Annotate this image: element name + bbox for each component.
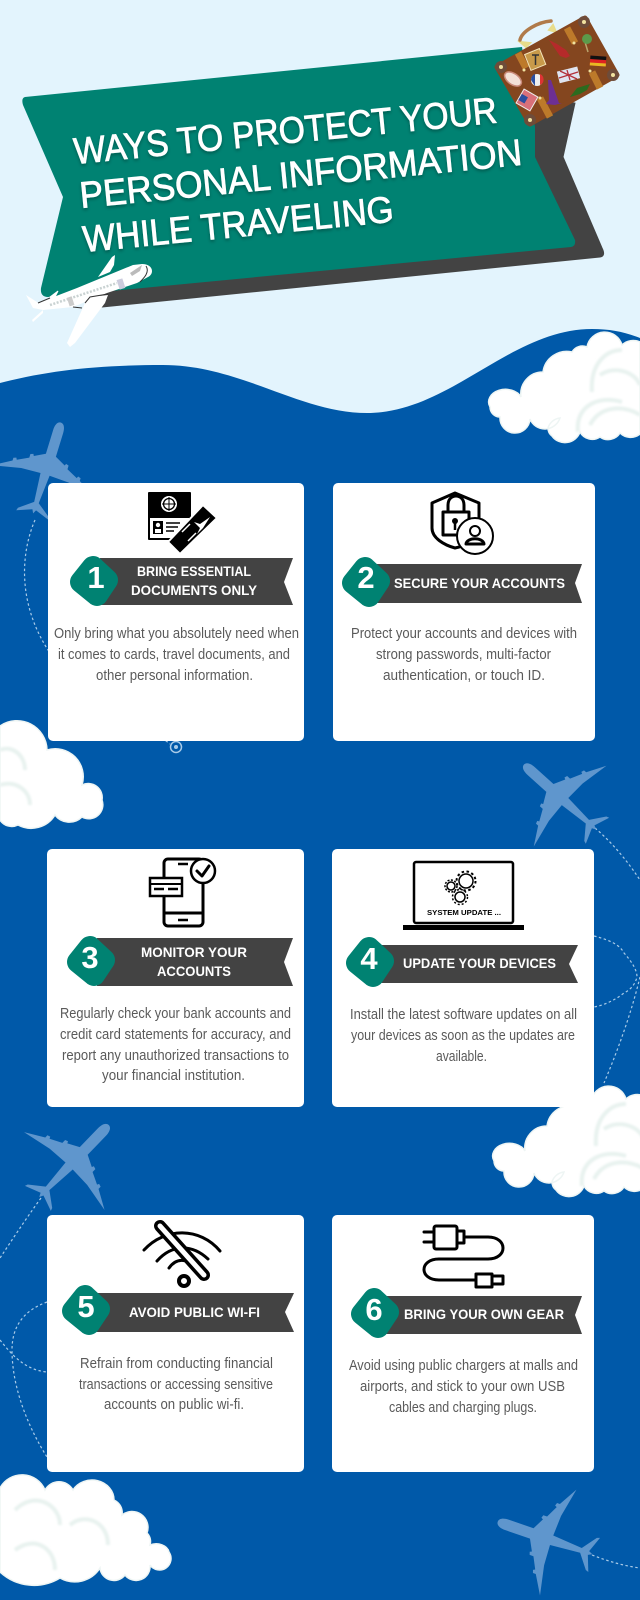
- body text: available.: [436, 1049, 487, 1065]
- number badge 1: 1: [87, 560, 105, 595]
- number badge 3: 3: [81, 940, 99, 975]
- number badge 6: 6: [365, 1292, 383, 1327]
- body text: your devices as soon as the updates are: [351, 1028, 575, 1044]
- icon: plug and cable: [424, 1226, 503, 1287]
- body text: transactions or accessing sensitive: [79, 1377, 273, 1393]
- body text: strong passwords, multi-factor: [376, 647, 551, 663]
- ribbon heading: [97, 938, 293, 986]
- body text: [54, 626, 299, 684]
- body text: [351, 626, 577, 684]
- body text: [349, 1358, 578, 1416]
- ribbon heading: MONITOR YOUR: [141, 944, 247, 960]
- ribbon heading: [380, 945, 578, 983]
- dashed flight paths: [0, 520, 640, 1568]
- body text: it comes to cards, travel documents, and: [58, 647, 290, 663]
- ribbon heading: BRING YOUR OWN GEAR: [404, 1306, 564, 1322]
- number badge 4: 4: [360, 941, 378, 976]
- number badge 5: [73, 1289, 99, 1324]
- body text: Install the latest software updates on all: [350, 1007, 577, 1023]
- body text: other personal information.: [96, 668, 253, 684]
- title text: WHILE TRAVELING: [81, 189, 395, 260]
- handle: [520, 25, 556, 47]
- body text: your financial institution.: [102, 1068, 245, 1084]
- body text: Avoid using public chargers at malls and: [349, 1358, 578, 1374]
- plane silhouette left middle: [0, 1086, 149, 1237]
- body text: authentication, or touch ID.: [383, 668, 545, 684]
- title text: [72, 90, 524, 260]
- banner shadow: [60, 60, 604, 307]
- body text: report any unauthorized transactions to: [62, 1048, 289, 1064]
- ribbon heading: AVOID PUBLIC WI-FI: [129, 1304, 260, 1320]
- ribbon heading: [385, 1296, 582, 1334]
- cloud right middle: [493, 1086, 640, 1197]
- ribbon heading: ACCOUNTS: [157, 963, 231, 979]
- panel: card 4: [332, 849, 594, 1107]
- plane silhouette right upper: [488, 724, 634, 871]
- icon: white airplane: [26, 255, 152, 347]
- number badge 1: [81, 560, 107, 595]
- panel: card 3: [47, 849, 304, 1107]
- ribbon heading: [100, 558, 293, 605]
- plane silhouette bottom right: [479, 1469, 612, 1600]
- number badge 3: [78, 940, 104, 975]
- body: [497, 18, 617, 124]
- cloud left upper: [0, 721, 103, 828]
- body text: Refrain from conducting financial: [80, 1356, 273, 1372]
- panel: card 2: [333, 483, 595, 741]
- stickers: [525, 49, 546, 70]
- body text: [350, 1007, 577, 1065]
- ribbon heading: BRING ESSENTIAL: [137, 563, 251, 579]
- number badge 2: 2: [357, 560, 375, 595]
- body text: airports, and stick to your own USB: [360, 1379, 565, 1395]
- number badge 2: [353, 560, 379, 596]
- body text: [79, 1356, 273, 1413]
- number badge 6: [362, 1292, 388, 1327]
- banner green ribbon: [22, 47, 575, 297]
- icon: shield lock and user: [432, 493, 493, 554]
- blue wave background: [0, 329, 640, 1600]
- panel: card 1: [48, 483, 304, 741]
- icon: laptop system update: [403, 862, 524, 930]
- icon: passport and ticket: [148, 492, 217, 554]
- icon: phone with card and check: [150, 859, 215, 926]
- ribbon heading: DOCUMENTS ONLY: [131, 582, 258, 598]
- body text: accounts on public wi-fi.: [104, 1397, 244, 1413]
- body text: [60, 1006, 291, 1084]
- plane silhouette top left: [0, 407, 112, 531]
- body text: cables and charging plugs.: [389, 1400, 537, 1416]
- icon: laptop system update: SYSTEM UPDATE ...: [427, 908, 501, 917]
- cloud bottom left: [0, 1475, 171, 1585]
- body text: Protect your accounts and devices with: [351, 626, 577, 642]
- ribbon heading: [92, 1293, 294, 1332]
- ribbon heading: UPDATE YOUR DEVICES: [403, 955, 556, 971]
- number badge 5: 5: [77, 1289, 95, 1324]
- body text: credit card statements for accuracy, and: [60, 1027, 291, 1043]
- ribbon heading: [375, 564, 582, 603]
- icon: crossed wifi: [144, 1226, 220, 1286]
- number badge 4: [357, 941, 383, 976]
- panel: card 6: [332, 1215, 594, 1472]
- body text: Regularly check your bank accounts and: [60, 1006, 291, 1022]
- icon: suitcase: [495, 16, 619, 126]
- cloud top right: [489, 332, 640, 443]
- panel: card 5: [47, 1215, 304, 1472]
- title text: WAYS TO PROTECT YOUR: [72, 90, 499, 172]
- body text: Only bring what you absolutely need when: [54, 626, 299, 642]
- title text: PERSONAL INFORMATION: [78, 132, 524, 216]
- ribbon heading: SECURE YOUR ACCOUNTS: [394, 575, 565, 591]
- title banner: [22, 47, 604, 307]
